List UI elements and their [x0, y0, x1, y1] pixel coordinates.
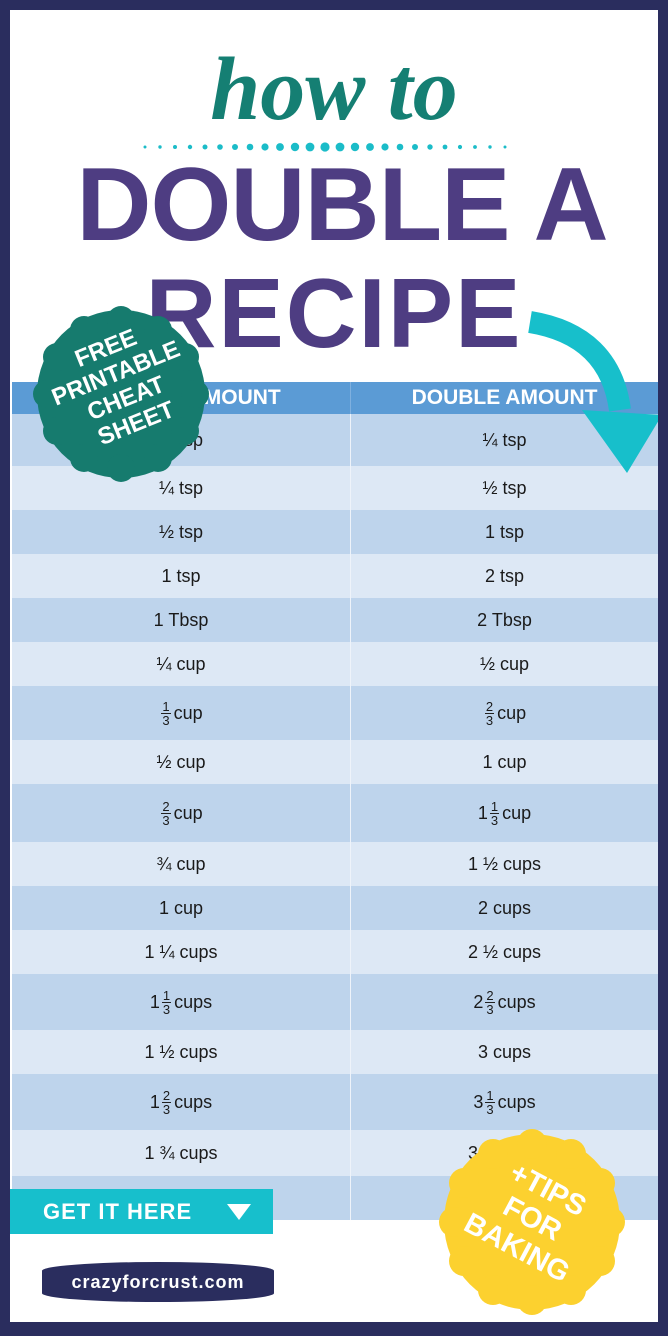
table: 2 cups [154, 1188, 208, 1208]
table: 1 tsp [485, 522, 524, 542]
table: 2 cups [473, 992, 536, 1012]
table: cup [174, 802, 203, 822]
table: 3 [162, 712, 170, 728]
dotted divider [144, 142, 506, 152]
badge: free printable cheat sheet: SHEET [94, 396, 178, 451]
table: 3 [486, 1002, 494, 1016]
badge: free printable cheat sheet: CHEAT [83, 371, 169, 426]
badge: tips for baking: FOR [498, 1191, 567, 1248]
badge: tips for baking: +TIPS [504, 1157, 591, 1223]
table: 2 [163, 1088, 170, 1102]
table: ½ cup [480, 654, 529, 674]
table: 1 ¾ cups [144, 1142, 218, 1162]
table: 3 [162, 812, 170, 828]
table: 1 tsp [161, 566, 201, 586]
table: ¼ cup [156, 654, 206, 674]
table: 1 ¼ cups [144, 942, 218, 962]
title: RECIPE: RECIPE [146, 258, 522, 368]
table header: DOUBLE AMOUNT [412, 386, 597, 409]
icon: down triangle [227, 1204, 251, 1220]
table: ½ cup [156, 752, 206, 772]
table: ¾ cup [156, 854, 206, 874]
table: 1 cup [159, 898, 203, 918]
table: cup [174, 702, 203, 722]
table: 2 ½ cups [468, 942, 541, 962]
table: 2 Tbsp [477, 610, 532, 630]
table: 1 cup [478, 802, 531, 822]
badge: tips for baking [439, 1129, 625, 1315]
table: 1 [486, 1088, 494, 1102]
table: 1 ½ cups [144, 1042, 218, 1062]
table: 1 Tbsp [154, 610, 208, 630]
table: 3 ½ cups [468, 1142, 541, 1162]
title: how to: how to [210, 40, 458, 139]
table: 3 [163, 1102, 170, 1116]
table: 4 cups [478, 1188, 531, 1208]
table: 2 tsp [485, 566, 524, 586]
table: 3 cups [473, 1092, 536, 1112]
logo: crazyforcrust.com [42, 1262, 274, 1302]
table: cup [497, 702, 526, 722]
table: 1 [491, 798, 498, 814]
title: DOUBLE A: DOUBLE A [76, 147, 608, 263]
badge: free printable cheat sheet: FREE [71, 324, 141, 373]
table: 1 [163, 988, 170, 1002]
table: 2 [486, 988, 494, 1002]
table: 3 [486, 712, 493, 728]
table: 3 [491, 812, 498, 828]
logo: crazyforcrust.com: crazyforcrust.com [71, 1272, 245, 1292]
table: 3 [486, 1102, 494, 1116]
table: ½ tsp [159, 522, 203, 542]
button: get it here: GET IT HERE [43, 1199, 192, 1224]
table: ¼ tsp [482, 430, 527, 450]
table header [12, 382, 658, 414]
table [12, 382, 658, 1220]
table: 1 cup [482, 752, 527, 772]
button: get it here [0, 1189, 273, 1234]
table: 1 [162, 698, 170, 714]
table: 2 [162, 798, 170, 814]
table: 1 cups [150, 992, 212, 1012]
table: ¼ tsp [159, 478, 203, 498]
badge: free printable cheat sheet: PRINTABLE [48, 336, 184, 411]
table: 2 cups [478, 898, 531, 918]
table: 1 ½ cups [468, 854, 541, 874]
table: 2 [486, 698, 493, 714]
arrow: curved teal [528, 311, 658, 473]
table: ½ tsp [482, 478, 527, 498]
table: 3 cups [478, 1042, 531, 1062]
badge: tips for baking: BAKING [459, 1207, 575, 1289]
badge: free printable cheat sheet [33, 306, 209, 482]
table: ⅛ tsp [159, 430, 203, 450]
table: 3 [163, 1002, 170, 1016]
table: 1 cups [150, 1092, 212, 1112]
table header: ORIGINAL AMOUNT [81, 386, 281, 409]
